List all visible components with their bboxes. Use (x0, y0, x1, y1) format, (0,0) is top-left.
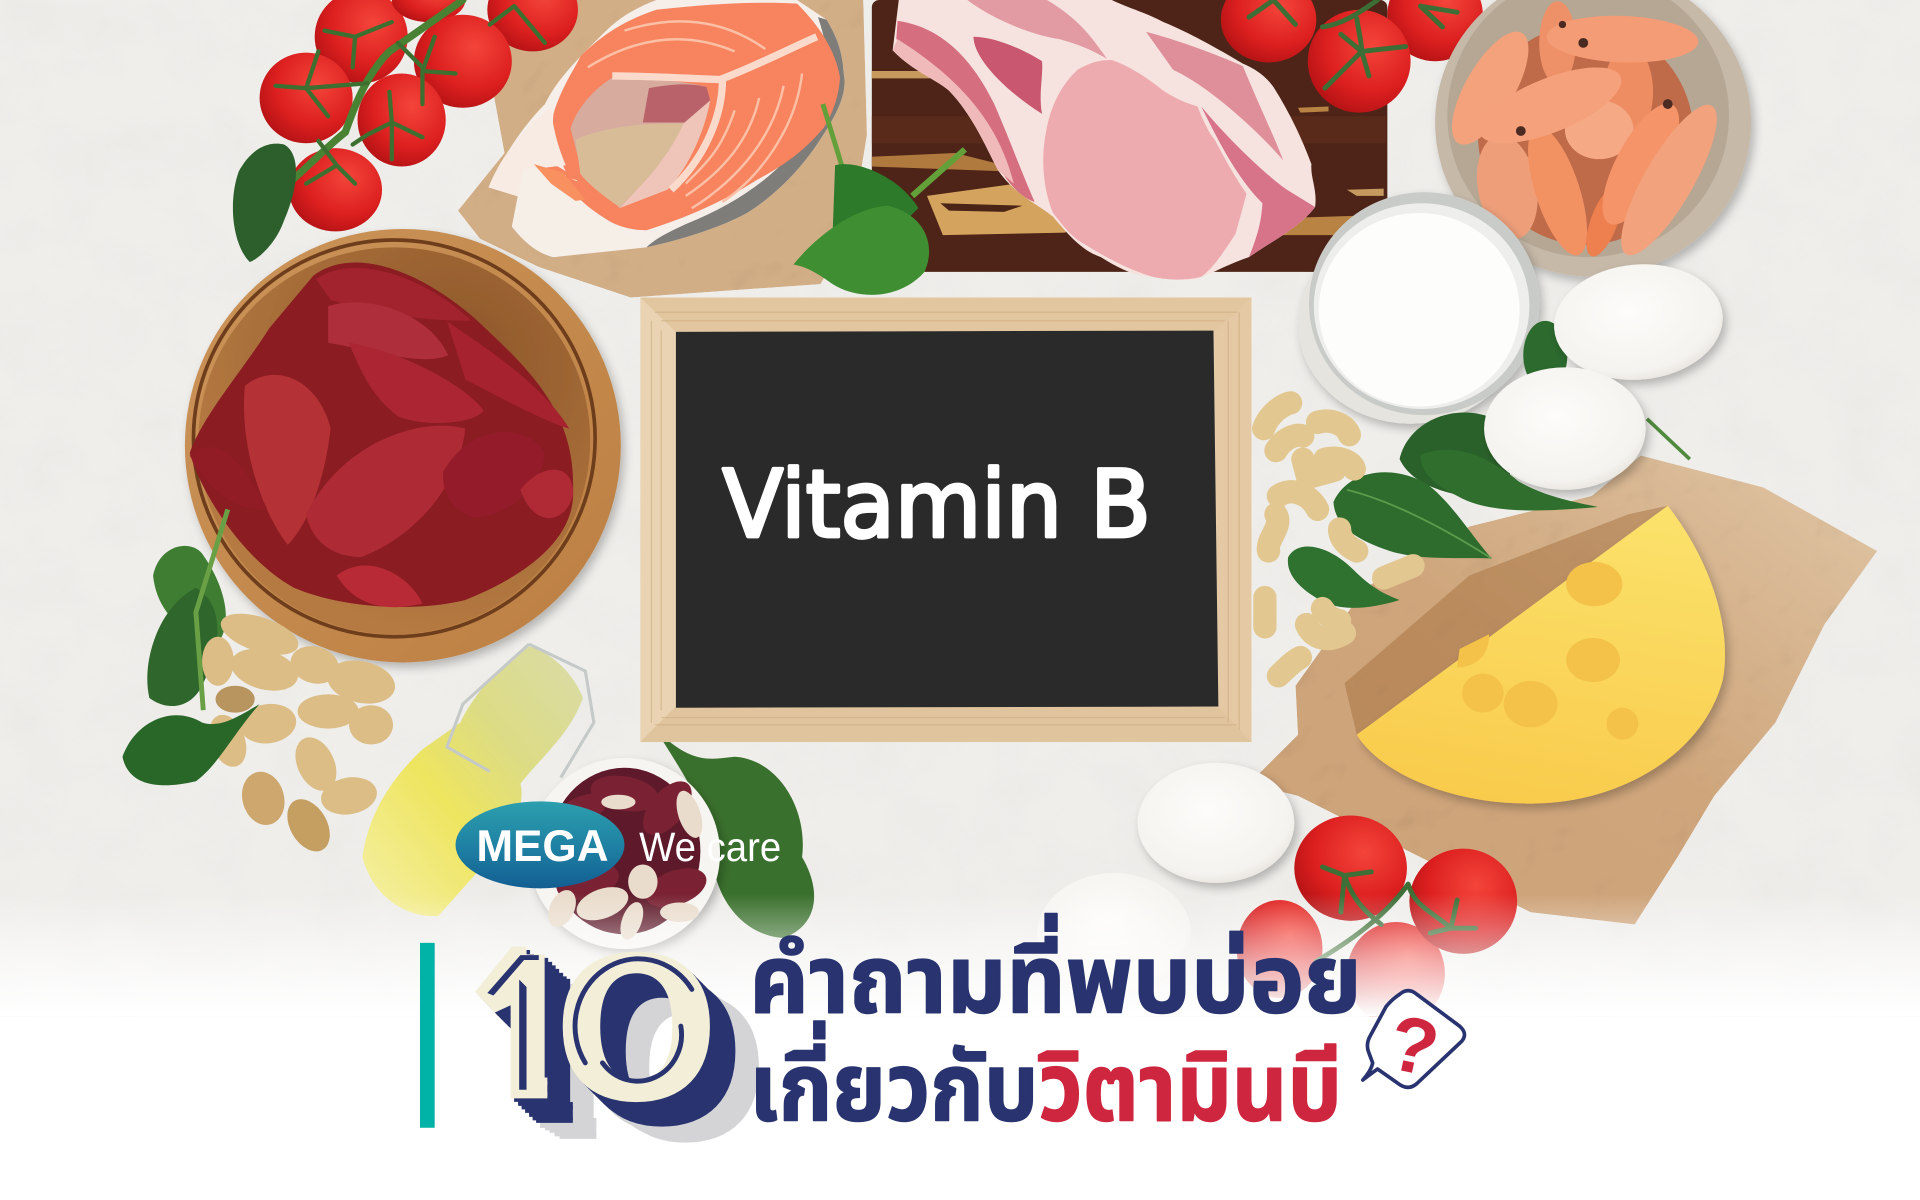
photo: wood bowl of liver (185, 229, 621, 662)
photo: eggs right (1484, 257, 1728, 490)
chalk text: Vitamin B: Vitamin B (722, 450, 1151, 558)
photo: spinach leaf bottom centre (655, 729, 814, 938)
title: second line: เกี่ยวกับวิตามินบี (749, 1020, 1342, 1141)
photo: pork chop (893, 0, 1316, 280)
number inline detail: one (487, 955, 539, 1090)
logo badge (456, 801, 624, 888)
big number 10: 1 (440, 872, 601, 1152)
icon: question speech bubble: ? (1381, 998, 1446, 1094)
photo: dark paper fold beside cheese (1344, 506, 1668, 735)
photo: salmon steak (489, 0, 845, 257)
photo: tomatoes bottom right (1237, 816, 1517, 1025)
bottom white fade (0, 894, 1920, 1016)
photo: egg fading at bottom (1037, 873, 1191, 996)
bottom white band (0, 1016, 1920, 1200)
icon: question speech bubble (1363, 991, 1464, 1094)
photo: peanuts (202, 605, 399, 859)
photo: front spinach leaf on peanuts (122, 704, 260, 785)
photo: brown paper under salmon (458, 0, 867, 298)
photo: spinach beside liver bowl (147, 509, 228, 710)
big number 10: 0 (553, 873, 719, 1152)
photo: spinach under egg and over cashews (1420, 450, 1598, 510)
photo: brown paper under cheese (1249, 456, 1877, 924)
photo: spinach leaf top centre (793, 104, 965, 295)
photo: bowl of kidney beans (529, 758, 720, 949)
chalkboard with wooden frame (640, 298, 1251, 742)
photo: cashews (1264, 403, 1413, 676)
photo: bowl of shrimp (1435, 0, 1751, 277)
photo: oil bottle (362, 644, 594, 916)
photo: wooden board (872, 0, 1387, 272)
number inline detail: zero (575, 959, 692, 1081)
logo: MEGA We care (456, 801, 781, 888)
photo: egg bottom centre (1138, 763, 1294, 883)
big number 10 (475, 946, 759, 1143)
photo: spinach leaves right (1288, 321, 1690, 608)
accent bar (420, 943, 435, 1128)
title: first line: คำถามที่พบบ่อย (749, 912, 1362, 1034)
logo badge: MEGA (476, 822, 609, 871)
photo: glass of milk (1298, 192, 1539, 424)
photo: vine tomatoes top right (1221, 0, 1483, 113)
logo tagline: We care (639, 824, 781, 870)
photo: vine tomatoes top left (233, 0, 578, 262)
photo: Swiss cheese wedge (1357, 506, 1725, 804)
